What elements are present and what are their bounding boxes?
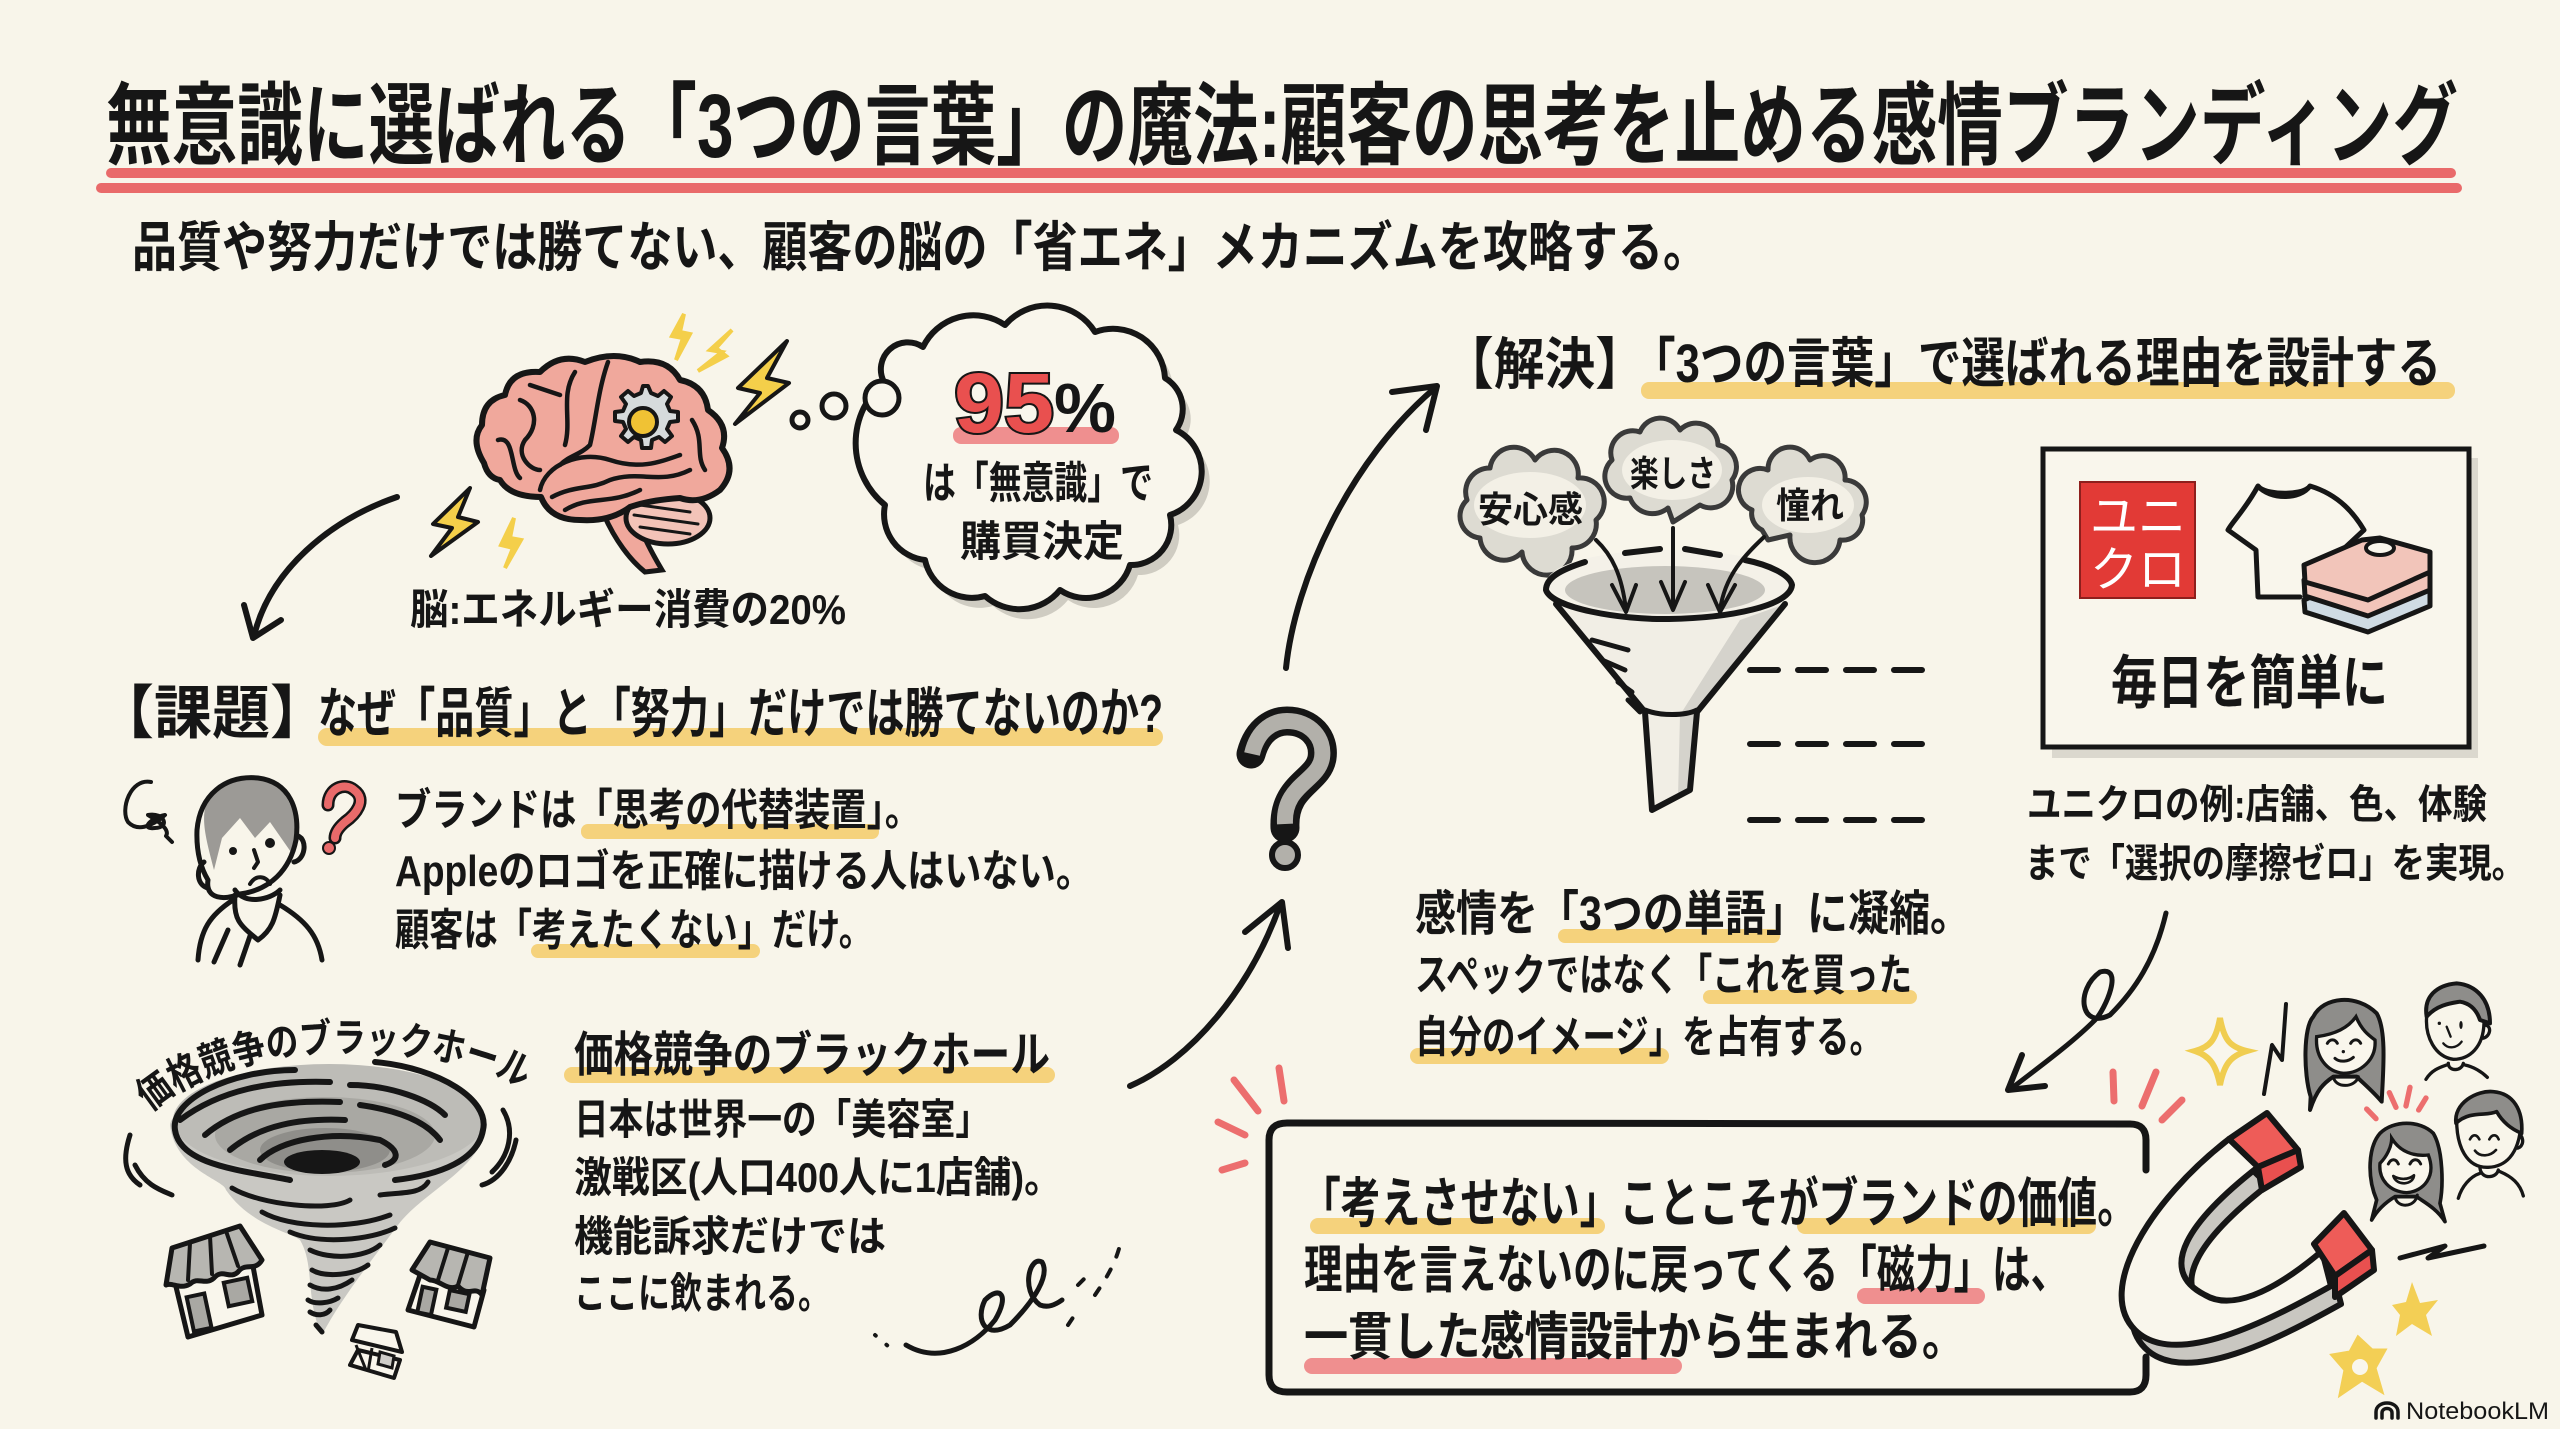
cloud: anshinkan: 安心感: [1478, 489, 1583, 530]
cloud: anshinkan: [1460, 447, 1604, 575]
NotebookLM logo: NotebookLM: [2406, 1398, 2549, 1425]
person: man top: [2426, 983, 2490, 1079]
text block: uniqlo caption: ユニクロの例:店舗、色、体験: [2027, 783, 2487, 827]
text block: price competition: 激戦区(人口400人に1店舗)。: [574, 1154, 1062, 1201]
subtitle: 品質や努力だけでは勝てない、顧客の脳の「省エネ」メカニズムを攻略する。: [132, 218, 1708, 278]
arrow: brain to problem: [244, 497, 397, 638]
uniqlo logo: [2080, 482, 2195, 598]
text block: price competition: 機能訴求だけでは: [574, 1213, 886, 1260]
uniqlo logo: ユニ: [2090, 491, 2186, 544]
icon: scribble: [125, 782, 172, 842]
text block: price competition: [564, 1029, 1062, 1317]
callout box: 「考えさせない」ことこそがブランドの価値。: [1301, 1174, 2137, 1234]
heading: problem: [96, 681, 1163, 746]
panel: uniqlo example: [2043, 449, 2478, 758]
heading: problem: 【課題】: [96, 681, 328, 746]
text block: three words: 感情を「3つの単語」に凝縮。: [1415, 888, 1971, 941]
text block: three words: 自分のイメージ」を占有する。: [1415, 1013, 1883, 1062]
heading: problem: なぜ「品質」と「努力」だけでは勝てないのか?: [318, 684, 1163, 744]
thought bubble: 95%: %: [1054, 369, 1116, 447]
heading: solution: 【解決】: [1443, 333, 1646, 396]
icon: funnel: [1546, 549, 1792, 810]
person: woman bottom: [2370, 1123, 2445, 1222]
squiggle decoration: [875, 1245, 1120, 1353]
cloud: tanoshisa: 楽しさ: [1630, 453, 1716, 494]
icon: sparkle and zigzags: [2195, 1004, 2484, 1258]
icon: folded clothes: [2304, 538, 2430, 632]
icon: t-shirt: [2228, 486, 2364, 597]
callout box: 理由を言えないのに戻ってくる「磁力」は、: [1304, 1242, 2069, 1300]
text block: thought substitute: [395, 786, 1093, 958]
arrow: loop to callout: [2008, 913, 2166, 1090]
thought bubble: 95%: 95: [954, 356, 1054, 450]
text block: uniqlo caption: [2025, 783, 2525, 886]
brain label: 脳:エネルギー消費の20%: [410, 586, 846, 633]
callout box: 一貫した感情設計から生まれる。: [1304, 1309, 1966, 1367]
thought bubble: 95%: は「無意識」で: [923, 459, 1153, 508]
dashed lines: [1750, 670, 1924, 820]
icon: red question mark: [323, 786, 360, 854]
thought bubble: 95%: 購買決定: [960, 518, 1124, 565]
box caption: 毎日を簡単に: [2111, 651, 2388, 716]
tornado curved label: 価格競争のブラックホール: [136, 1017, 527, 1112]
callout box: [1269, 1123, 2146, 1392]
icon: tornado: [126, 1062, 516, 1335]
cloud: akogare: 憧れ: [1776, 485, 1844, 526]
icon: lightning bolts: [431, 314, 789, 568]
icon: small shop: [350, 1325, 402, 1378]
cloud: tanoshisa: [1605, 418, 1736, 522]
icon: left shop: [166, 1226, 262, 1337]
text block: thought substitute: 顧客は「考えたくない」だけ。: [395, 906, 873, 955]
text block: three words: スペックではなく「これを買った: [1415, 951, 1912, 1000]
text block: three words: [1410, 888, 1971, 1064]
heading: solution: [1443, 333, 2455, 399]
text block: thought substitute: ブランドは「思考の代替装置」。: [395, 786, 921, 835]
text block: thought substitute: Appleのロゴを正確に描ける人はいない。: [395, 847, 1093, 896]
icon: stars: [2332, 1282, 2438, 1395]
uniqlo logo: クロ: [2090, 544, 2186, 597]
thought bubble: 95%: [792, 306, 1210, 619]
arrow: tornado to question: [1130, 902, 1288, 1086]
text block: price competition: ここに飲まれる。: [574, 1270, 830, 1317]
people group: [2305, 983, 2523, 1222]
text block: price competition: 価格競争のブラックホール: [574, 1029, 1050, 1082]
red spark lines left: [1218, 1068, 1284, 1170]
text block: price competition: 日本は世界一の「美容室」: [574, 1096, 990, 1143]
person: woman top: [2305, 1000, 2384, 1110]
icon: brain with gear: [476, 356, 730, 572]
red spark lines right: [2113, 1072, 2182, 1120]
arrow: question to solution: [1286, 386, 1437, 668]
cloud: akogare: [1738, 447, 1866, 563]
icon: magnet: [2122, 1113, 2374, 1363]
person: man bottom: [2456, 1092, 2523, 1198]
icon: big question mark: [1251, 721, 1322, 868]
arrows: words into funnel: [1596, 528, 1764, 612]
icon: right shop: [408, 1242, 490, 1327]
sparks: [2367, 1087, 2426, 1119]
icon: confused person: [197, 777, 322, 965]
